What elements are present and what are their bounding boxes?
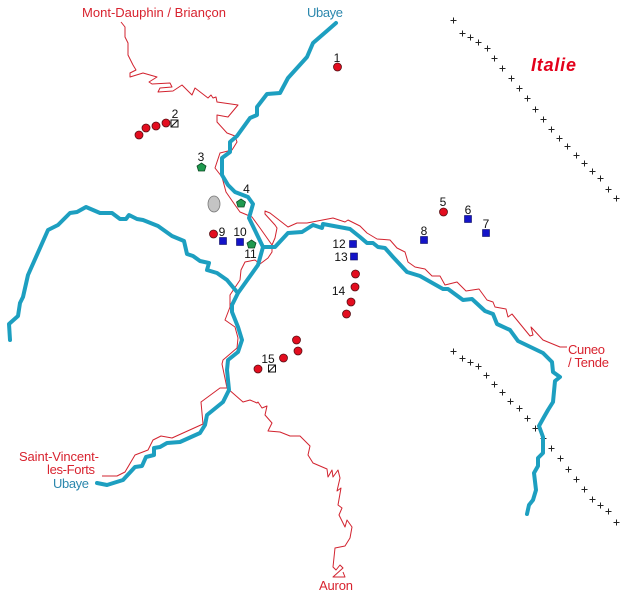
site 10 xyxy=(233,225,247,246)
site 3: 3 xyxy=(198,150,205,164)
site 14 xyxy=(332,270,360,318)
label: Italie: Italie xyxy=(531,55,576,75)
label: Saint-Vincent-les-Forts: Saint-Vincent- xyxy=(19,449,99,464)
label: Cuneo / Tende xyxy=(568,342,609,370)
site 15: 15 xyxy=(261,352,275,366)
site 11: 11 xyxy=(244,247,257,261)
site 1 xyxy=(334,51,342,71)
border line: south Italian frontier xyxy=(450,348,620,526)
label: Cuneo / Tende: / Tende xyxy=(568,355,609,370)
site 4 xyxy=(236,182,250,207)
site 1: 1 xyxy=(334,51,341,65)
site 9: 9 xyxy=(219,225,226,239)
site 10: 10 xyxy=(233,225,247,239)
road: to Auron xyxy=(227,388,352,577)
site 11 xyxy=(244,240,257,261)
site 6: 6 xyxy=(465,203,472,217)
site 13: 13 xyxy=(334,250,348,264)
border line: north Italian frontier xyxy=(450,18,620,202)
label: Saint-Vincent-les-Forts xyxy=(19,449,99,477)
grey lake xyxy=(208,196,220,212)
label: Ubaye north: Ubaye xyxy=(307,5,343,20)
site 6 xyxy=(464,203,472,222)
road: to Saint-Vincent-les-Forts xyxy=(102,245,272,476)
road: to Cuneo / Tende xyxy=(265,211,567,347)
site 13 xyxy=(334,250,358,264)
site 12 xyxy=(332,237,356,251)
site 5 xyxy=(440,195,448,216)
site 15 xyxy=(254,336,302,373)
site 2 xyxy=(135,107,179,139)
label: Mont-Dauphin / Briancon: Mont-Dauphin / Briançon xyxy=(82,5,226,20)
site 3 xyxy=(197,150,206,171)
site 8: 8 xyxy=(421,224,428,238)
site 2: 2 xyxy=(172,107,179,121)
site 12: 12 xyxy=(332,237,346,251)
label: Ubaye south: Ubaye xyxy=(53,476,89,491)
site 4: 4 xyxy=(243,182,250,196)
river: eastern tributary xyxy=(263,224,560,514)
site 14: 14 xyxy=(332,284,345,298)
site 5: 5 xyxy=(440,195,447,209)
site 9 xyxy=(210,225,226,244)
label: Auron: Auron xyxy=(319,578,353,593)
label: Saint-Vincent-les-Forts: les-Forts xyxy=(47,462,96,477)
river: upper Ubaye xyxy=(97,23,336,485)
site 7: 7 xyxy=(483,217,490,231)
site 8 xyxy=(420,224,428,244)
road: to Mont-Dauphin / Briancon xyxy=(121,22,272,245)
label: Cuneo / Tende: Cuneo xyxy=(568,342,605,357)
site 7 xyxy=(482,217,490,236)
river: western tributary xyxy=(9,207,237,340)
